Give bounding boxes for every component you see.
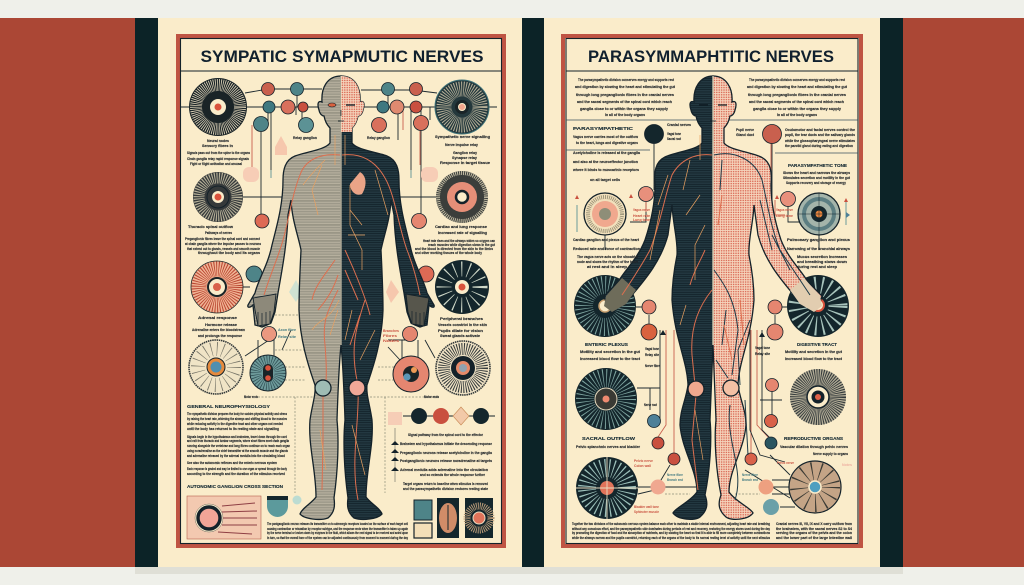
panel: sympathetic poster: [178, 36, 504, 546]
text: lower left column: Nerve fibre: [667, 473, 683, 477]
dial: dark spokes: [435, 260, 489, 314]
text: intro left: [575, 78, 676, 117]
chart: signal pathway legend: Postganglionic neurons release noradrenaline at targets: [400, 459, 492, 463]
figure: right half: [713, 76, 822, 519]
text: bottom article left: while the airways narrow and the pupils constrict, returning each of the organs of the body to its normal resting level of activity until the next stimulus: [571, 536, 770, 540]
text: lower left column: Sphincter muscle: [634, 510, 659, 514]
text: upper right captions: Sympathetic nerve signalling: [435, 135, 491, 139]
text: side labels: Motor ends: [424, 395, 439, 399]
text: lower left column: Nerve fibre: [645, 364, 660, 368]
text: upper left captions: Chain ganglia relay rapid response signals: [187, 157, 249, 161]
text: lower left column: Relay site: [645, 353, 659, 357]
text: lower right column: Vagal tone: [755, 346, 770, 350]
text: mid left column: The vagus nerve acts on the sinoatrial: [577, 255, 638, 259]
text: middle right captions: Cardiac and lung response: [435, 225, 487, 229]
dial: hatched bottom right: [436, 341, 490, 395]
text: bottom article right: and the lower part of the large intestine wall: [776, 536, 852, 540]
text: intro right: in all of the body organs: [777, 113, 817, 117]
text: intro left: in all of the body organs: [605, 113, 645, 117]
text: middle right captions: [415, 225, 496, 255]
text: upper left column: Acetylcholine is released at the ganglia: [573, 151, 641, 155]
text: mid left column: [573, 208, 650, 269]
text: intro right: ganglia close to or within the organs they supply: [753, 107, 842, 111]
text: lower right column: REPRODUCTIVE ORGANS: [784, 436, 843, 441]
text: bottom left article: The sympathetic division prepares the body for sudden physical activity and stress: [187, 412, 287, 416]
text: upper left captions: Relay ganglion: [293, 136, 318, 140]
text: mid right column: during rest and sleep: [797, 265, 838, 269]
anatomical figure: left half: [248, 76, 434, 519]
text: upper left column: Vagal tone: [667, 132, 681, 136]
text: lower left column: Colon wall: [634, 464, 651, 468]
text: bottom left article: and exit from thoracic and lumbar segments, where short fibres meet chain ganglia: [187, 439, 290, 443]
chart: signal pathway legend: and so extends the whole response further: [420, 473, 485, 477]
text: lower dial captions: Peripheral branches: [440, 317, 483, 321]
text: bottom article right: [776, 522, 853, 540]
text: upper right column: the parotid gland during eating and digestion: [785, 144, 854, 148]
chart: signal pathway legend: Adrenal medulla adds adrenaline into the circulation: [400, 468, 489, 472]
text: middle left captions: Thoracic spinal outflow: [188, 225, 233, 229]
title: SYMPATIC SYMAPMUTIC NERVES: [200, 47, 484, 66]
text: upper right column: pupil, the tear ducts and the salivary glands: [785, 133, 855, 137]
text: upper right column: while the glossopharyngeal nerve stimulates: [784, 139, 855, 143]
text: bottom article right: Cranial nerves III, VII, IX and X carry outflow from: [776, 522, 853, 526]
text: bottom left article: running alongside the vertebrae and long fibres continue on to reach each organ: [187, 444, 290, 448]
text: upper left captions: Fight or flight activation and arousal: [190, 162, 242, 166]
text: bottom article right: serving the organs of the pelvis and the colon: [776, 531, 853, 535]
text: intro right: [747, 78, 848, 117]
text: mid right column: Pulmonary ganglion and plexus: [787, 238, 850, 242]
text: mid left column: Lung tone: [633, 218, 650, 222]
text: lower right column: Nerve supply to organs: [813, 452, 848, 456]
text: bottom left article: Signals begin in the hypothalamus and brainstem, travel down through the cord: [187, 435, 287, 439]
right poster paper: [544, 18, 880, 567]
dial: right hand: [787, 275, 849, 337]
text: upper right captions: [435, 135, 491, 165]
text: upper left column: Sacral root: [667, 137, 682, 141]
text: lower left column: [576, 342, 683, 514]
chart: signal pathway legend: Preganglionic neurons release acetylcholine in the ganglia: [400, 451, 493, 455]
text: lower dial captions: Pupils dilate for vision: [438, 329, 484, 333]
text: mid right column: Mucus secretion increases: [797, 255, 847, 259]
text: bottom article left: by promoting the digestion of food and the absorption of nutrients, and by slowing the heart so that it is able to fill more completely between contractions: [572, 531, 770, 535]
dial: upper right: [798, 193, 840, 250]
text: bottom left article: See also the autonomic reflexes and the enteric nervous system: [187, 461, 277, 465]
nerves: [264, 135, 420, 500]
text: bottom centre: by the nerve terminal or broken down by enzymes in the fluid, which allows the next signal to be received and acted upon: [267, 531, 408, 535]
small pale drop labels: [243, 136, 438, 303]
dial: top right: [435, 80, 489, 134]
hands: [604, 278, 822, 312]
dial: bottom right: [789, 461, 841, 513]
text: side labels: Axon fibre: [278, 328, 296, 332]
text: lower left column: Pelvic splanchnic nerves and bladder: [576, 445, 640, 449]
dial: lower middle left: [575, 368, 637, 430]
icon: teal badge: [267, 496, 302, 517]
text: bottom centre: The postganglionic neuron releases its transmitter on to adrenergic receptors located on the surface of each target cell: [267, 522, 408, 526]
text: lower left column: Increased blood flow to the tract: [580, 357, 641, 361]
text: upper right captions: Ganglion relay: [453, 151, 478, 155]
title: PARASYMMAPHTITIC NERVES: [588, 47, 834, 66]
text: bottom article left: without any conscious effort, and the parasympathetic side dominates during periods of rest and recovery, restoring the energy stores used during the day: [571, 527, 771, 531]
figure: right half: [341, 76, 434, 519]
dial: salmon rays: [191, 261, 243, 313]
text: lower right column: Increased blood flow to the tract: [785, 357, 843, 361]
arrows: [575, 194, 850, 337]
dial: top left: [189, 78, 247, 136]
text: bottom left article: GENERAL NEUROPHYSIOLOGY: [187, 404, 270, 409]
text: bottom left article: using noradrenaline as the chief transmitter at the smooth muscle and the glands: [187, 449, 288, 453]
diagram: ganglion cross section: [187, 496, 261, 539]
knee joints: [315, 380, 365, 396]
text: bottom centre: [267, 522, 409, 540]
text: lower dial captions: Vessels constrict in the skin: [438, 323, 488, 327]
text: lower right column: Pelvic nerve: [777, 461, 794, 465]
text: lower right column: Vascular dilation through pelvic nerves: [780, 445, 848, 449]
dial: grey hatched: [790, 369, 846, 425]
chart: signal pathway legend: Target organs return to baseline when stimulus is removed: [403, 482, 489, 486]
chart: signal pathway legend: and the parasympathetic division restores resting state: [403, 487, 488, 491]
dial: bottom left: [576, 457, 640, 519]
text: mid left column: Cardiac ganglion and plexus of the heart: [573, 238, 640, 242]
text: mid left column: Heart rate: [633, 214, 650, 218]
text: upper left captions: Signals pass out from the spine to the organs: [187, 151, 250, 155]
text: upper right captions: Response in target tissue: [440, 161, 490, 165]
knee joints: [688, 380, 739, 397]
text: intro left: ganglia close to or within the organs they supply: [580, 107, 669, 111]
text: lower right column: Branch end: [742, 478, 758, 482]
anatomical figure: left half: [604, 76, 822, 519]
dial: upper left: [584, 193, 626, 235]
text: mid left column: Vagus nerve: [633, 208, 650, 212]
text: upper right column: Slows the heart and narrows the airways: [783, 171, 850, 175]
text: mid right column: Narrowing of the bronchial airways: [787, 247, 850, 251]
left poster spine: [135, 18, 158, 567]
text: upper left column: Cranial nerves: [667, 123, 691, 127]
text: mid left column: Reduced rate and force of contraction: [573, 247, 641, 251]
text: upper right captions: Synapse relay: [452, 156, 478, 160]
text: mid right column: and breathing slows down: [797, 260, 848, 264]
text: upper left column: to the heart, lungs and digestive organs: [576, 141, 638, 145]
text: bottom centre: in turn, so that the overall tone of the system can be adjusted continuously from moment to moment during the day: [267, 536, 409, 540]
nerves: [622, 135, 810, 500]
text: lower dial captions: Adrenaline enters the bloodstream: [192, 328, 246, 332]
text: bottom left article: AUTONOMIC GANGLION CROSS SECTION: [187, 484, 284, 489]
poster frame: [563, 36, 861, 546]
dial: teal: [250, 355, 286, 391]
text: lower right column: Motility and secretion in the gut: [785, 350, 843, 354]
chart: signal pathway legend: Signal pathway from the spinal cord to the effector: [408, 433, 483, 437]
text: upper left column: Vagus nerve carries most of the outflow: [573, 135, 638, 139]
text: middle left captions: at chain ganglia where the impulse passes to neurons: [185, 242, 261, 246]
text: lower left column: Nerve root: [644, 403, 657, 407]
text: lower right column: Notes: [842, 463, 852, 467]
text: middle right captions: and other working tissues of the whole body: [415, 251, 483, 255]
text: lower left column: Vagal tone: [645, 347, 659, 351]
text: intro left: The parasympathetic division conserves energy and supports rest: [578, 78, 675, 82]
connector lines: [181, 89, 497, 493]
text: lower right column: [742, 342, 852, 482]
text: side labels: Fibres: [383, 334, 397, 338]
text: mid left column: node and slows the rhythm of the heart: [577, 260, 639, 264]
text: upper left captions: [187, 136, 391, 166]
text: bottom article left: [571, 522, 771, 540]
text: side labels: Relay site: [278, 335, 296, 339]
text: lower dial captions: Adrenal response: [198, 316, 237, 320]
left red band: [0, 18, 135, 567]
text: middle left captions: Pathways of nerves: [205, 231, 232, 235]
text: upper left column: and also at the neuroeffector junction: [573, 160, 639, 164]
text: bottom left article: according to the strength and the duration of the stimulus received: [187, 472, 286, 476]
centre line: [712, 76, 714, 345]
text: lower right column: Nerve fibre: [742, 473, 758, 477]
text: bottom left article: Each response is graded and may be limited to one organ or spread through the body: [187, 467, 288, 471]
text: lower left column: ENTERIC PLEXUS: [585, 342, 628, 347]
pale and teal nodes: [650, 480, 779, 515]
hands: [253, 294, 429, 326]
text: middle left captions: throughout the body and its organs: [198, 251, 260, 255]
face: [699, 105, 727, 121]
text: upper left column: where it binds to muscarinic receptors: [572, 168, 639, 172]
text: lower left column: SACRAL OUTFLOW: [582, 436, 636, 441]
text: bottom article right: the brainstem, with the sacral nerves S2 to S4: [776, 527, 853, 531]
text: upper left captions: Sensory fibres in: [202, 144, 234, 148]
poster frame: [178, 36, 504, 546]
text: bottom left article: while reducing activity in the digestive tract and other organs not needed: [186, 422, 283, 426]
text: middle left captions: that extend out to glands, vessels and smooth muscle: [187, 247, 260, 251]
text: upper right column: Gland duct: [736, 133, 755, 137]
text: upper left column: [572, 123, 691, 182]
drop shadow: [135, 567, 903, 574]
text: lower dial captions: Hormone release: [205, 323, 237, 327]
text: middle right captions: reach muscles while digestion slows in the gut: [428, 243, 496, 247]
text: bottom left article: until the body has returned to its resting state and signalling: [187, 427, 280, 431]
text: upper right column: Stimulates secretion and motility in the gut: [783, 176, 851, 180]
right red band: [903, 18, 1024, 567]
text: bottom left article: [186, 404, 290, 489]
text: upper right column: Supports recovery and storage of energy: [786, 181, 847, 185]
text: bottom left article: by raising the heart rate, widening the airways and shifting blood to the muscles: [187, 417, 287, 421]
text: upper left captions: Relay ganglion: [367, 136, 391, 140]
text: lower right column: DIGESTIVE TRACT: [797, 342, 837, 347]
right poster spine right: [880, 18, 903, 567]
text: upper left captions: Neural nodes: [207, 139, 229, 143]
text: lower dial captions: Sweat glands activate: [440, 334, 480, 338]
text: side labels: Motor ends: [244, 395, 258, 399]
text: middle right captions: Increased rate of signalling: [438, 231, 488, 235]
small node circles: [246, 82, 434, 342]
text: upper right column: [736, 128, 855, 185]
text: middle right captions: Heart rate rises and the airways widen so oxygen can: [423, 239, 496, 243]
connector lines: [577, 142, 846, 507]
text: lower left column: Bladder wall tone: [634, 505, 659, 509]
text: lower dial captions: [192, 316, 488, 338]
text: upper left column: on all target cells: [590, 178, 620, 182]
text: middle left captions: [185, 225, 261, 255]
text: bottom article left: Together the two divisions of the autonomic nervous system balance each other to maintain a stable internal environment, adjusting heart rate and breathing: [572, 522, 770, 526]
dial: cream with blue centre: [189, 340, 243, 394]
text: upper right column: Oculomotor and facial nerves control the: [785, 128, 855, 132]
text: lower left column: Pelvic nerve: [634, 459, 653, 463]
text: side labels: [244, 328, 439, 399]
dial: left hand: [574, 275, 636, 337]
text: side labels: Branches: [383, 329, 399, 333]
chart: signal pathway legend: Brainstem and hypothalamus initiate the descending response: [400, 442, 492, 446]
text: bottom left article: and adrenaline released by the adrenal medulla into the circulating blood: [187, 454, 285, 458]
text: intro left: through long preganglionic fibres in the cranial nerves: [576, 93, 674, 97]
chart: signal pathway legend: [388, 407, 495, 491]
right poster spine left: [522, 18, 544, 567]
text: mid right column: Vagus nerve: [776, 208, 793, 212]
text: intro right: and the sacral segments of the spinal cord which reach: [749, 100, 845, 104]
text: lower dial captions: and prolongs the response: [198, 334, 242, 338]
text: middle left captions: Preganglionic fibres leave the spinal cord and connect: [185, 237, 261, 241]
panel: parasympathetic poster: [563, 36, 861, 546]
text: lower left column: Branch end: [667, 478, 683, 482]
text: intro right: and digestion by slowing the heart and stimulating the gut: [747, 85, 848, 89]
text: intro right: through long preganglionic fibres in the cranial nerves: [748, 93, 846, 97]
text: intro left: and the sacral segments of the spinal cord which reach: [577, 100, 673, 104]
text: intro right: The parasympathetic division conserves energy and supports rest: [749, 78, 846, 82]
dial: salmon: [393, 356, 429, 392]
text: upper right column: PARASYMPATHETIC TONE: [788, 163, 847, 168]
text: mid right column: [776, 208, 850, 269]
text: upper right column: Pupil nerve: [736, 128, 754, 132]
dial: middle right: [436, 171, 488, 223]
text: mid left column: at rest and in sleep: [587, 265, 628, 269]
small node circles: [638, 124, 796, 465]
dial: middle left: [193, 172, 243, 222]
text: middle right captions: and the blood is directed from the skin to the limbs: [415, 247, 493, 251]
text: upper left column: PARASYMPATHETIC: [573, 126, 634, 131]
thumbnail images: [414, 498, 493, 538]
left poster paper: [158, 18, 522, 567]
text: upper right captions: Nerve impulse relay: [445, 143, 479, 147]
face: [328, 103, 355, 121]
text: intro left: and digestion by slowing the heart and stimulating the gut: [575, 85, 676, 89]
text: side labels: Nodes: [383, 339, 399, 343]
text: lower right column: Relay site: [755, 352, 770, 356]
text: lower left column: Motility and secretion in the gut: [580, 350, 641, 354]
centre line: [340, 76, 342, 345]
text: bottom centre: causing contraction or relaxation by receptor subtype, and the response ends when the transmitter is taken up again: [267, 527, 408, 531]
text: mid right column: Lung tone: [776, 214, 793, 218]
